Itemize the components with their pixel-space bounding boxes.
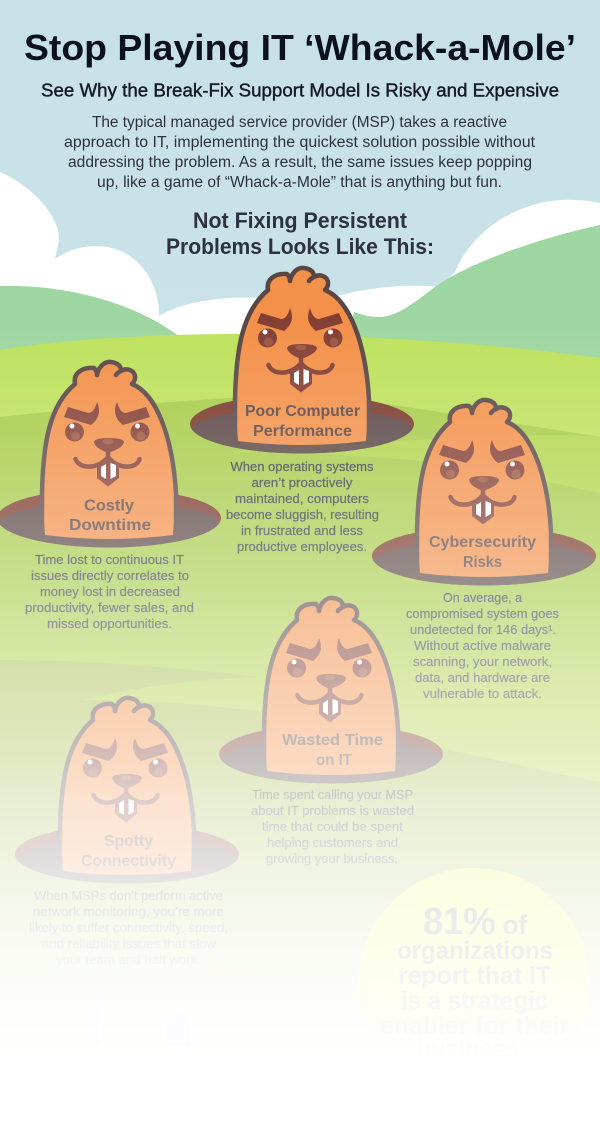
text: Costly Downtime: issues directly correlates to [31, 568, 189, 583]
section heading: Not Fixing Persistent [193, 208, 408, 233]
text: Cybersecurity Risks: On average, a [443, 590, 523, 605]
mole label [69, 498, 151, 534]
stat: 81% of organizations: is a strategic [401, 987, 548, 1015]
text: Poor Computer Performance: maintained, computers [235, 491, 370, 506]
text: Cybersecurity Risks: Without active malware [414, 638, 551, 653]
stat: 81% of organizations: report that IT [398, 962, 551, 990]
text: Wasted Time on IT: about IT problems is wasted [251, 803, 414, 818]
text: Costly Downtime: Time lost to continuous IT [35, 552, 184, 567]
mole label: on IT [316, 752, 352, 769]
text: Spotty Connectivity [29, 888, 228, 967]
text: Wasted Time on IT: growing your business. [266, 851, 398, 866]
text: Spotty Connectivity: When MSPs don’t perform active [34, 888, 223, 903]
clouds [0, 172, 600, 360]
mole: Costly Downtime [0, 362, 221, 548]
mole: Spotty Connectivity [15, 698, 239, 884]
text: Costly Downtime [25, 552, 194, 631]
title: Stop Playing IT ‘Whack-a-Mole’ [24, 27, 576, 68]
text: Cybersecurity Risks: data, and hardware are [415, 670, 550, 685]
lime foreground hills [0, 334, 600, 1125]
mole label: Spotty [104, 833, 153, 850]
mole label: Risks [463, 554, 502, 571]
section heading [166, 208, 434, 259]
text: Spotty Connectivity: network monitoring, you’re more [33, 904, 224, 919]
text: Spotty Connectivity: and reliability issues that slow [42, 936, 217, 951]
text: Cybersecurity Risks: vulnerable to attack. [423, 686, 542, 701]
stat: 81% of organizations: organizations [397, 937, 553, 965]
text: Costly Downtime: missed opportunities. [47, 616, 172, 631]
text: Poor Computer Performance: in frustrated and less [241, 523, 363, 538]
stat: 81% of organizations: business. [417, 1035, 525, 1063]
mole label [429, 534, 536, 571]
text: Wasted Time on IT: time that could be spent [262, 819, 403, 834]
text: Cybersecurity Risks: undetected for 146 days¹. [410, 622, 556, 637]
stat: 81% of organizations: 81% of [423, 901, 528, 943]
subtitle: See Why the Break-Fix Support Model Is Risky and Expensive [41, 80, 559, 100]
section heading: Problems Looks Like This: [166, 234, 434, 259]
back hills [0, 225, 600, 370]
mole label: Downtime [69, 517, 151, 534]
text: Wasted Time on IT: Time spent calling your MSP [252, 787, 413, 802]
stat: 81% of organizations [380, 901, 569, 1063]
intro paragraph: The typical managed service provider (MSP) takes a reactive [92, 114, 507, 131]
text: Spotty Connectivity: likely to suffer connectivity, speed, [29, 920, 228, 935]
text: Cybersecurity Risks [406, 590, 559, 701]
mole label [282, 732, 383, 769]
mole label: Cybersecurity [429, 534, 536, 551]
intro paragraph [64, 114, 536, 191]
text: Cybersecurity Risks: scanning, your network, [413, 654, 552, 669]
mole: Wasted Time on IT [219, 598, 443, 784]
text: Poor Computer Performance: aren’t proactively [252, 475, 353, 490]
white fade overlay [0, 300, 600, 1125]
mole: Cybersecurity Risks [372, 400, 596, 586]
text: Wasted Time on IT [251, 787, 414, 866]
intro paragraph: addressing the problem. As a result, the same issues keep popping [68, 154, 532, 171]
mole label [81, 833, 176, 870]
mole label: Poor Computer [245, 403, 360, 420]
mole label: Costly [84, 498, 134, 514]
text: Poor Computer Performance: When operating systems [230, 459, 374, 474]
stat: 81% of organizations: enabler for their [380, 1012, 569, 1040]
mole label [245, 403, 360, 440]
mole: Poor Computer Performance [190, 268, 414, 454]
text: Poor Computer Performance [226, 459, 379, 554]
faint hidden illustration at the bottom [96, 993, 190, 1046]
mole label: Connectivity [81, 853, 176, 870]
text: Costly Downtime: productivity, fewer sales, and [25, 600, 194, 615]
text: Cybersecurity Risks: compromised system goes [406, 606, 559, 621]
mole label: Wasted Time [282, 732, 383, 749]
intro paragraph: approach to IT, implementing the quickest solution possible without [64, 134, 536, 151]
sun circle [358, 868, 590, 1100]
text: Costly Downtime: money lost in decreased [40, 584, 180, 599]
text: Spotty Connectivity: your team and halt work. [56, 952, 201, 967]
text: Poor Computer Performance: become sluggish, resulting [226, 507, 379, 522]
intro paragraph: up, like a game of “Whack-a-Mole” that is anything but fun. [97, 174, 502, 191]
text: Wasted Time on IT: helping customers and [267, 835, 398, 850]
mole label: Performance [253, 423, 352, 440]
text: Poor Computer Performance: productive employees. [237, 539, 367, 554]
